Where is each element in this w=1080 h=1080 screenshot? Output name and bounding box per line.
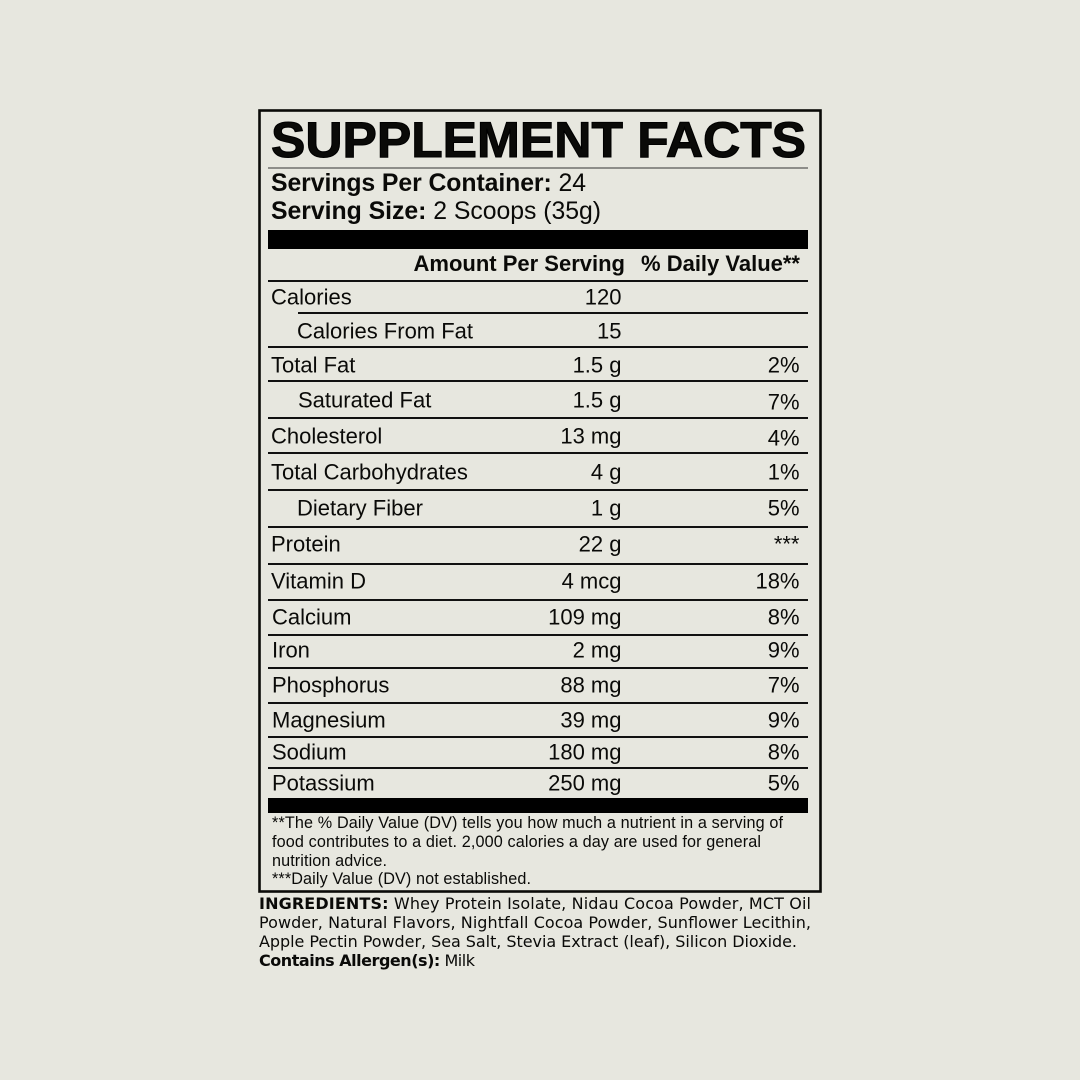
row: potassium: 5% bbox=[768, 770, 800, 796]
row: vitamin d bbox=[271, 568, 800, 594]
row: protein bbox=[271, 532, 800, 556]
row: total carbohydrates: Total Carbohydrates bbox=[271, 460, 468, 484]
row: saturated fat: 1.5 g bbox=[573, 388, 622, 412]
ingredients: Powder, Natural Flavors, Nightfall Cocoa Powder, Sunflower Lecithin, bbox=[259, 913, 811, 932]
row: cholesterol: 13 mg bbox=[560, 424, 622, 448]
row: total fat: 2% bbox=[768, 352, 800, 378]
row: sodium: 180 mg bbox=[548, 740, 622, 764]
row: calories: 120 bbox=[585, 284, 622, 310]
row: total carbohydrates: 4 g bbox=[591, 460, 622, 484]
footnotes: food contributes to a diet. 2,000 calories a day are used for general bbox=[272, 833, 761, 851]
row: potassium: Potassium bbox=[272, 770, 375, 796]
row: saturated fat: 7% bbox=[768, 390, 800, 414]
row: protein: *** bbox=[774, 532, 800, 556]
footnotes: nutrition advice. bbox=[272, 852, 387, 870]
row: protein: 22 g bbox=[579, 532, 622, 556]
bottom black bar bbox=[268, 798, 808, 813]
column headers bbox=[414, 251, 800, 276]
row: iron bbox=[272, 638, 800, 662]
row: total fat bbox=[271, 352, 800, 378]
row: magnesium bbox=[272, 708, 800, 732]
row: dietary fiber bbox=[297, 496, 800, 520]
row: calcium bbox=[272, 604, 800, 630]
row: phosphorus: Phosphorus bbox=[272, 672, 389, 698]
supplement facts panel bbox=[260, 110, 820, 892]
row: dietary fiber: 5% bbox=[768, 496, 800, 520]
row: total carbohydrates bbox=[271, 460, 800, 484]
row: iron: 9% bbox=[768, 638, 800, 662]
row: calories from fat bbox=[297, 318, 622, 344]
row: cholesterol: 4% bbox=[768, 426, 800, 450]
row: total fat: 1.5 g bbox=[573, 352, 622, 378]
row: iron: Iron bbox=[272, 638, 310, 662]
footnotes bbox=[272, 814, 784, 888]
allergen statement: Contains Allergen(s): Milk bbox=[259, 951, 476, 970]
servings per container: Servings Per Container: 24 bbox=[271, 170, 586, 197]
row: phosphorus: 7% bbox=[768, 672, 800, 698]
row: saturated fat: Saturated Fat bbox=[298, 388, 431, 412]
row: magnesium: 39 mg bbox=[560, 708, 622, 732]
row: iron: 2 mg bbox=[573, 638, 622, 662]
row: dietary fiber: Dietary Fiber bbox=[297, 496, 423, 520]
ingredients: INGREDIENTS: Whey Protein Isolate, Nidau Cocoa Powder, MCT Oil bbox=[259, 894, 811, 913]
row: calories bbox=[271, 284, 622, 310]
row: calories from fat: Calories From Fat bbox=[297, 318, 473, 344]
title: SUPPLEMENT FACTS bbox=[271, 111, 806, 168]
row: potassium: 250 mg bbox=[548, 770, 622, 796]
row: total fat: Total Fat bbox=[271, 352, 355, 378]
row: dietary fiber: 1 g bbox=[591, 496, 622, 520]
column headers: % Daily Value** bbox=[641, 251, 800, 276]
row: sodium: 8% bbox=[768, 740, 800, 764]
row: calcium: 8% bbox=[768, 604, 800, 630]
row: cholesterol: Cholesterol bbox=[271, 424, 382, 448]
ingredients bbox=[259, 894, 811, 951]
row: calories: Calories bbox=[271, 284, 352, 310]
row: phosphorus bbox=[272, 672, 800, 698]
row: cholesterol bbox=[271, 424, 800, 450]
column headers: Amount Per Serving bbox=[414, 251, 625, 276]
row: vitamin d: 18% bbox=[755, 568, 800, 594]
row: calcium: 109 mg bbox=[548, 604, 622, 630]
footnotes: ***Daily Value (DV) not established. bbox=[272, 870, 531, 888]
row: saturated fat bbox=[298, 388, 800, 414]
row: magnesium: Magnesium bbox=[272, 708, 386, 732]
ingredients: Apple Pectin Powder, Sea Salt, Stevia Extract (leaf), Silicon Dioxide. bbox=[259, 932, 797, 951]
row: calcium: Calcium bbox=[272, 604, 351, 630]
footnotes: **The % Daily Value (DV) tells you how much a nutrient in a serving of bbox=[272, 814, 784, 832]
row: magnesium: 9% bbox=[768, 708, 800, 732]
top black bar bbox=[268, 230, 808, 249]
row: vitamin d: 4 mcg bbox=[562, 568, 622, 594]
serving size: Serving Size: 2 Scoops (35g) bbox=[271, 198, 601, 225]
row: sodium: Sodium bbox=[272, 740, 347, 764]
row: calories from fat: 15 bbox=[597, 318, 622, 344]
row: protein: Protein bbox=[271, 532, 341, 556]
row: vitamin d: Vitamin D bbox=[271, 568, 366, 594]
row: potassium bbox=[272, 770, 800, 796]
row: sodium bbox=[272, 740, 800, 764]
row: total carbohydrates: 1% bbox=[768, 460, 800, 484]
row: phosphorus: 88 mg bbox=[560, 672, 622, 698]
